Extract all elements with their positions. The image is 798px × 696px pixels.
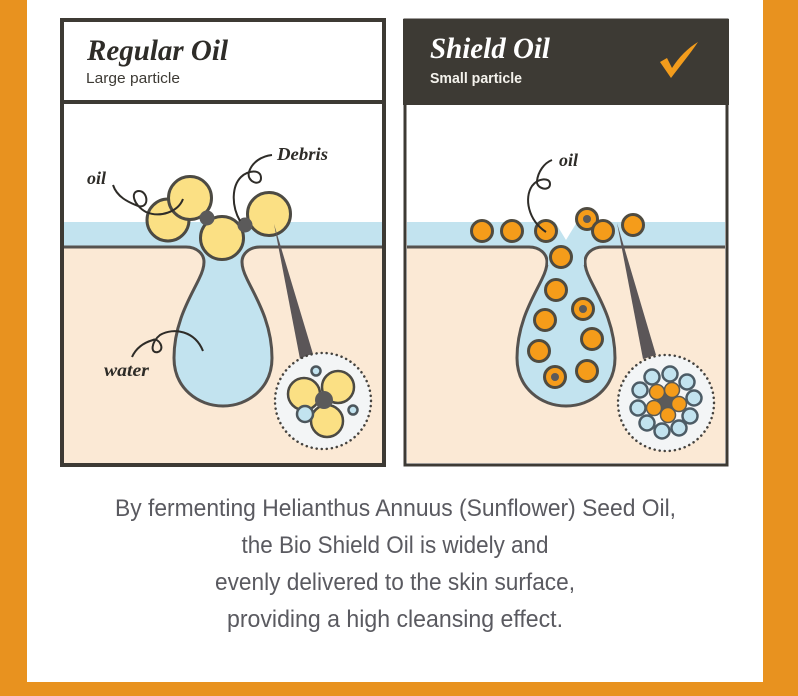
callout line: debris bbox=[234, 155, 272, 221]
label: oil: oil bbox=[87, 168, 106, 188]
panel: regular oil bbox=[62, 20, 384, 465]
callout line: oil bbox=[528, 160, 552, 232]
panel frame bbox=[62, 20, 384, 465]
description text: providing a high cleansing effect. bbox=[227, 606, 563, 633]
debris inside particles bbox=[551, 215, 591, 381]
magnified particle circle bbox=[275, 353, 371, 449]
heading: regular oil: Regular Oil bbox=[86, 34, 229, 67]
large oil particles bbox=[147, 176, 290, 260]
icon: check mark bbox=[660, 42, 698, 78]
callout line: water bbox=[132, 331, 203, 357]
label: water: water bbox=[104, 360, 150, 380]
debris dots bbox=[200, 210, 252, 232]
description text: the Bio Shield Oil is widely and bbox=[242, 532, 548, 559]
follicle bbox=[64, 247, 382, 406]
description text: By fermenting Helianthus Annuus (Sunflower) Seed Oil, bbox=[115, 495, 676, 522]
small oil particles bbox=[472, 208, 644, 388]
label: debris: Debris bbox=[276, 144, 328, 164]
callout line: oil bbox=[113, 185, 183, 214]
skin layer bbox=[407, 248, 725, 463]
blue surface band with notch bbox=[407, 222, 725, 248]
description text bbox=[115, 495, 676, 633]
pointer wedge bbox=[274, 224, 313, 359]
skin layer bbox=[64, 248, 382, 463]
subheading: large particle: Large particle bbox=[86, 71, 180, 87]
magnified particle circle bbox=[618, 355, 714, 451]
pointer wedge bbox=[617, 223, 656, 359]
blue surface band bbox=[64, 222, 382, 248]
follicle bbox=[407, 247, 725, 406]
panel: shield oil bbox=[403, 19, 729, 465]
heading: shield oil: Shield Oil bbox=[430, 32, 551, 65]
panel frame bbox=[405, 20, 727, 465]
description text: evenly delivered to the skin surface, bbox=[215, 569, 575, 596]
label: oil: oil bbox=[559, 150, 578, 170]
subheading: small particle: Small particle bbox=[430, 71, 522, 87]
header bar bbox=[403, 19, 729, 105]
